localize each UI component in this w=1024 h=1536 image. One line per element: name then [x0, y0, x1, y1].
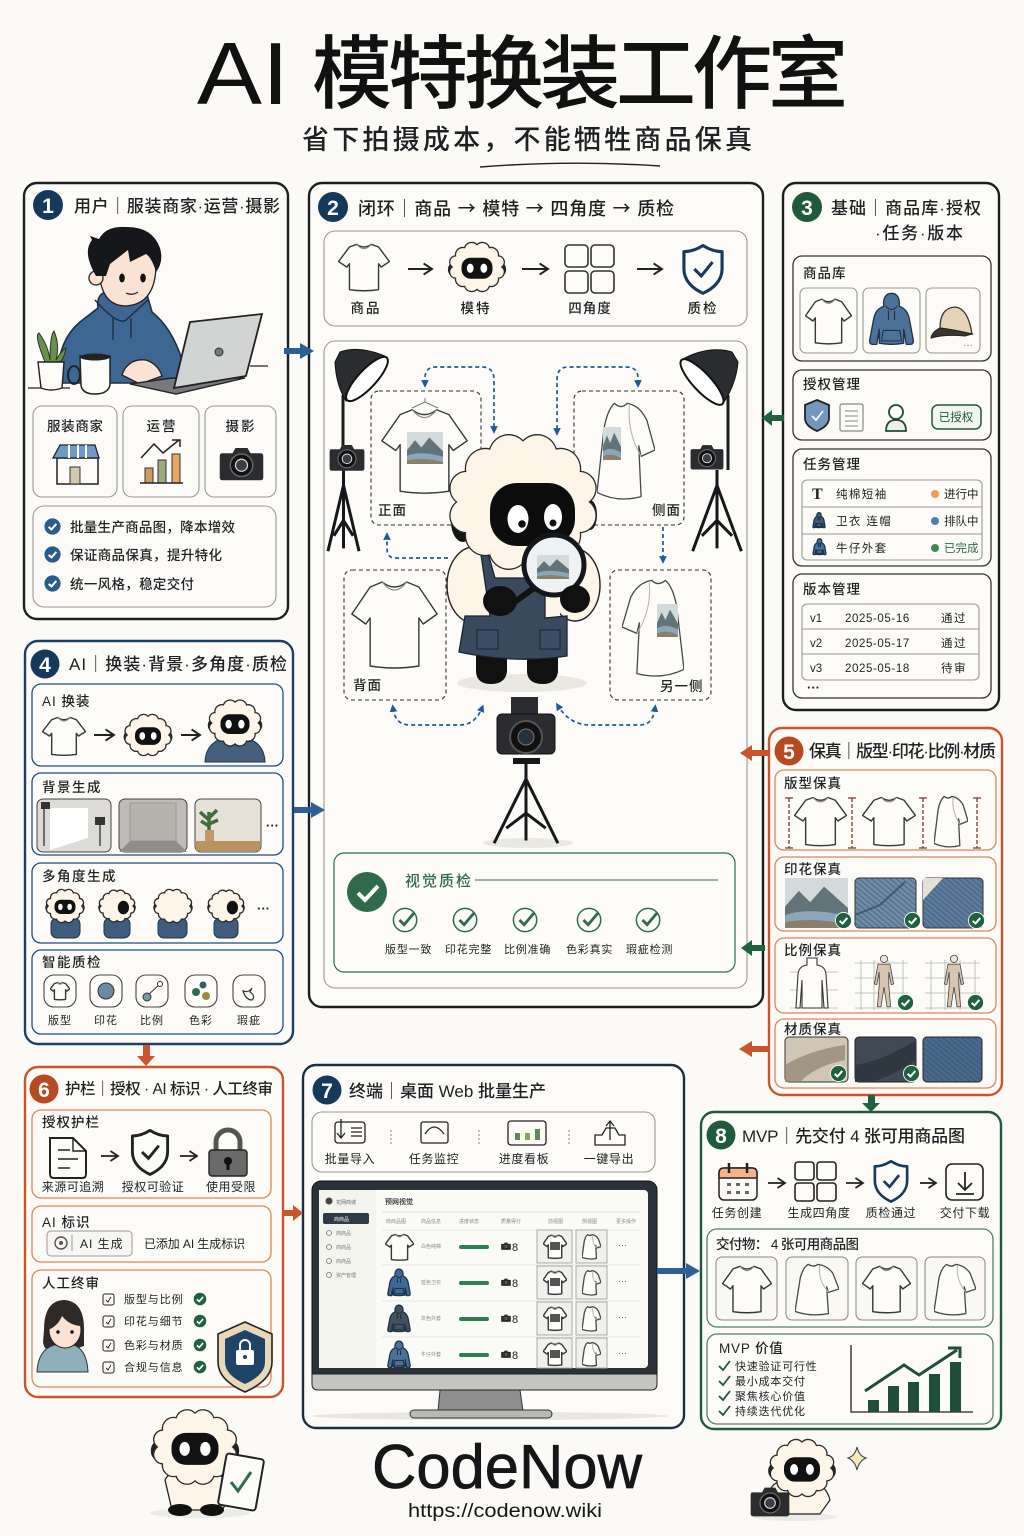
monitor with dashboard: 白色纯棉	[421, 1243, 441, 1250]
badge 4: 4	[39, 654, 51, 677]
card: material fidelity: 材质保真	[784, 1021, 842, 1037]
card: print fidelity: 印花保真	[784, 861, 842, 877]
card: operations: 运营	[146, 418, 178, 434]
visual QC box: 视觉质检	[405, 872, 473, 890]
card: multi-angle: 多角度生成	[42, 868, 117, 884]
heading: 护栏｜授权 · AI 标识 · 人工终审	[65, 1079, 273, 1098]
illustration: person at laptop	[28, 227, 268, 394]
card: AI swap	[32, 684, 283, 766]
card: task management	[793, 449, 991, 566]
panel 1: users	[24, 183, 288, 619]
main camera on tripod	[483, 697, 573, 848]
benefits list: 保证商品保真，提升特化	[70, 547, 222, 563]
card: human review: 人工终审	[42, 1275, 100, 1291]
badge 8	[706, 1120, 736, 1150]
panel 7: terminal	[303, 1065, 684, 1428]
card: license guardrail: 使用受限	[206, 1179, 256, 1194]
card: license management: 授权管理	[803, 376, 861, 392]
arrow: guardrails to terminal	[283, 1205, 303, 1221]
monitor with dashboard: 侧视图	[582, 1218, 597, 1225]
card: human review: 印花与细节	[124, 1315, 184, 1328]
flow strip: 模特	[460, 300, 492, 316]
card: product library: ···	[963, 340, 973, 351]
card: task management: 卫衣 连帽	[836, 514, 892, 528]
card: deliverables	[707, 1229, 993, 1327]
monitor with dashboard: 进度状态	[459, 1218, 479, 1225]
card: version management	[793, 574, 991, 698]
front tee view	[371, 391, 481, 525]
badge 7	[312, 1076, 342, 1104]
monitor with dashboard: 商商品	[336, 1244, 351, 1251]
visual QC box: 比例准确	[504, 942, 551, 956]
card: background generation: 背景生成	[42, 779, 102, 795]
card: task management: 进行中	[944, 488, 978, 501]
monitor with dashboard: ···	[618, 1312, 627, 1322]
card: smart QC: 色彩	[189, 1013, 213, 1027]
MVP flow	[712, 1161, 990, 1220]
flow strip: 质检	[688, 300, 718, 316]
card: AI label: 已添加 AI 生成标识	[144, 1237, 245, 1251]
MVP flow: 质检通过	[866, 1205, 916, 1220]
badge 1	[33, 190, 63, 220]
arrow: users to loop	[284, 343, 314, 359]
benefits list	[33, 506, 276, 607]
arrow: fidelity to MVP	[862, 1095, 880, 1112]
card: merchant: 服装商家	[47, 418, 104, 434]
MVP flow: 生成四角度	[787, 1205, 851, 1220]
CodeNow logo: CodeNow	[372, 1433, 642, 1502]
icon: reviewer	[37, 1300, 88, 1372]
arrow: fidelity to scene	[740, 745, 769, 761]
benefits list: 批量生产商品图，降本增效	[70, 519, 236, 535]
heading: 终端｜桌面 Web 批量生产	[349, 1082, 546, 1101]
arrow: material to scene	[739, 1041, 769, 1057]
arrow: AI to loop	[294, 802, 325, 818]
other side tee view	[610, 570, 711, 700]
card: license guardrail: 来源可追溯	[42, 1179, 104, 1194]
card: version management: 版本管理	[803, 581, 861, 597]
benefits list: 统一风格，稳定交付	[70, 576, 194, 592]
card: photography: 摄影	[226, 418, 256, 434]
card: task management: T	[812, 486, 823, 503]
flow strip: 四角度	[568, 301, 612, 316]
monitor with dashboard: 更多操作	[616, 1218, 636, 1225]
heading: MVP｜先交付 4 张可用商品图	[742, 1126, 965, 1146]
card: MVP value: 聚焦核心价值	[735, 1389, 806, 1403]
monitor with dashboard: 资产管理	[336, 1272, 356, 1279]
card: license guardrail	[32, 1110, 271, 1198]
mascot: sheep with magnifier	[447, 435, 600, 692]
panel 2: closed loop	[309, 183, 763, 1007]
monitor with dashboard: ···	[618, 1276, 627, 1286]
tool strip: 一键导出	[584, 1152, 634, 1166]
card: version management: v3	[810, 663, 822, 675]
visual QC box: 瑕疵检测	[626, 942, 673, 956]
monitor with dashboard: 8	[512, 1242, 518, 1254]
heading: ·任务·版本	[875, 224, 963, 243]
badge 8: 8	[715, 1125, 727, 1148]
card: version management: 2025-05-16	[845, 613, 910, 625]
card: smart QC: 瑕疵	[237, 1013, 261, 1027]
heading: AI｜换装·背景·多角度·质检	[69, 655, 287, 674]
heading: 保真｜版型·印花·比例·材质	[809, 742, 996, 761]
tool strip: 进度看板	[499, 1151, 549, 1166]
panel 8: MVP	[701, 1112, 1001, 1429]
card: task management: 纯棉短袖	[836, 487, 888, 501]
title: AI	[197, 24, 289, 123]
badge 7: 7	[321, 1080, 333, 1103]
card: product library: 商品库	[803, 266, 846, 281]
card: version management: v1	[810, 613, 822, 625]
card: AI swap: AI 换装	[42, 693, 91, 709]
card: MVP value: 快速验证可行性	[735, 1359, 818, 1373]
card: task management: 已完成	[944, 541, 979, 555]
card: license management: 已授权	[939, 410, 974, 424]
card: MVP value: 最小成本交付	[735, 1374, 806, 1388]
card: material fidelity	[775, 1019, 996, 1088]
card: pattern fidelity: 版型保真	[784, 775, 842, 791]
panel 4: AI capabilities	[25, 641, 293, 1044]
badge 3: 3	[801, 197, 813, 220]
card: print fidelity	[775, 857, 996, 931]
card: license guardrail: 授权护栏	[42, 1115, 100, 1130]
panel 3: foundation	[783, 183, 999, 710]
card: license guardrail: 授权可验证	[122, 1179, 184, 1194]
badge 6: 6	[38, 1079, 50, 1102]
tool strip: 批量导入	[325, 1151, 375, 1166]
heading: 闭环｜商品 → 模特 → 四角度 → 质检	[358, 195, 674, 221]
monitor with dashboard: 8	[512, 1278, 518, 1290]
flow strip	[324, 231, 747, 326]
panel 5: fidelity	[769, 728, 1002, 1095]
visual QC box: 印花完整	[445, 942, 492, 956]
card: multi-angle: ···	[257, 901, 270, 916]
front tee view: 正面	[378, 503, 407, 518]
card: human review: 版型与比例	[124, 1292, 184, 1306]
footer mascot: clipboard	[150, 1410, 264, 1518]
footer mascot: camera	[751, 1439, 837, 1521]
card: operations	[123, 406, 199, 497]
monitor with dashboard: 花网商城	[336, 1199, 356, 1206]
MVP flow: 交付下载	[940, 1205, 990, 1220]
card: version management: ···	[807, 680, 820, 695]
side tee view	[574, 391, 684, 525]
chart: growth bars	[851, 1345, 973, 1412]
arrow: fidelity to QC	[741, 940, 765, 956]
monitor with dashboard: 8	[512, 1314, 518, 1326]
card: pattern fidelity	[775, 770, 996, 850]
card: AI label	[32, 1206, 271, 1262]
card: background generation	[32, 773, 283, 855]
visual QC box: 版型一致	[385, 942, 432, 956]
studio scene	[324, 341, 747, 988]
right studio light and camera	[675, 350, 741, 551]
arrow: foundation to loop	[762, 410, 784, 426]
card: version management: v2	[810, 638, 822, 650]
card: task management: 任务管理	[803, 456, 861, 472]
badge 6	[30, 1074, 58, 1104]
card: version management: 待审	[941, 661, 967, 675]
card: background generation: ···	[266, 818, 279, 833]
card: smart QC: 比例	[140, 1013, 164, 1027]
visual QC box: 色彩真实	[566, 942, 613, 956]
card: version management: 通过	[941, 612, 967, 625]
badge 4	[30, 650, 60, 678]
icon: security shield	[218, 1322, 272, 1392]
card: human review	[32, 1270, 272, 1392]
monitor with dashboard: 质量得分	[501, 1218, 521, 1225]
monitor with dashboard: 8	[512, 1350, 518, 1362]
dashed loop arrows	[387, 367, 663, 725]
monitor with dashboard: 商商品	[336, 1258, 351, 1265]
website URL: https://codenow.wiki	[408, 1501, 602, 1522]
card: task management: 牛仔外套	[836, 541, 888, 555]
card: task management: 排队中	[944, 514, 978, 528]
visual QC box	[334, 853, 735, 972]
badge 5: 5	[783, 741, 795, 764]
card: AI label: AI 标识	[42, 1215, 91, 1230]
monitor with dashboard: ···	[618, 1348, 627, 1358]
monitor with dashboard: 牛仔外套	[421, 1351, 441, 1358]
card: human review: 合规与信息	[124, 1360, 184, 1374]
badge 2	[318, 192, 348, 222]
card: AI label: AI 生成	[80, 1237, 124, 1251]
card: merchant	[33, 406, 117, 497]
monitor with dashboard: 预网视觉	[385, 1197, 413, 1206]
card: deliverables: 交付物： 4 张可用商品图	[716, 1236, 859, 1252]
card: version management: 2025-05-18	[845, 663, 910, 675]
MVP flow: 任务创建	[712, 1205, 762, 1220]
card: proportion fidelity	[775, 938, 996, 1013]
side tee view: 侧面	[652, 503, 681, 518]
heading: 基础｜商品库·授权	[831, 199, 981, 218]
card: product library	[793, 256, 991, 361]
card: MVP value: MVP 价值	[719, 1341, 784, 1356]
panel 6: guardrails	[25, 1067, 283, 1397]
badge 3	[792, 192, 822, 222]
title: 模特换装工作室	[312, 30, 848, 119]
heading: 用户｜服装商家·运营·摄影	[74, 196, 280, 216]
monitor with dashboard: 灰色外套	[421, 1315, 441, 1322]
card: license management	[793, 370, 991, 440]
card: photography	[205, 406, 276, 497]
flow strip: 商品	[350, 301, 382, 316]
back tee view: 背面	[353, 677, 382, 693]
card: MVP value	[707, 1334, 993, 1424]
card: proportion fidelity: 比例保真	[784, 942, 842, 958]
monitor with dashboard: 前视图	[548, 1218, 563, 1225]
card: smart QC: 版型	[48, 1013, 72, 1027]
other side tee view: 另一侧	[660, 679, 704, 694]
card: smart QC	[32, 950, 283, 1034]
card: smart QC: 印花	[94, 1014, 118, 1027]
heading	[831, 199, 981, 243]
card: version management: 通过	[941, 637, 967, 650]
monitor with dashboard	[312, 1181, 668, 1420]
monitor with dashboard: ···	[618, 1240, 627, 1250]
icon: sparkle	[848, 1447, 866, 1470]
card: multi-angle	[32, 863, 283, 943]
monitor with dashboard: 商商品图	[386, 1218, 406, 1225]
badge 1: 1	[42, 195, 54, 218]
card: smart QC: 智能质检	[42, 954, 102, 970]
monitor with dashboard: 蓝色卫衣	[421, 1279, 441, 1286]
card: version management: 2025-05-17	[845, 638, 910, 650]
monitor with dashboard: 商商品	[336, 1230, 351, 1237]
left studio light and camera	[328, 349, 393, 551]
tool strip: 任务监控	[409, 1151, 459, 1166]
back tee view	[344, 570, 446, 700]
card: MVP value: 持续迭代优化	[735, 1404, 806, 1418]
tool strip	[312, 1112, 655, 1172]
monitor with dashboard: 商品信息	[421, 1218, 441, 1225]
arrow: AI to guardrails	[137, 1045, 155, 1066]
card: human review: 色彩与材质	[124, 1338, 184, 1352]
badge 5	[774, 736, 804, 766]
subtitle: 省下拍摄成本，不能牺牲商品保真	[302, 125, 752, 155]
monitor with dashboard: 商商品	[334, 1216, 349, 1223]
badge 2: 2	[327, 197, 339, 220]
arrow: terminal to MVP	[657, 1263, 700, 1279]
